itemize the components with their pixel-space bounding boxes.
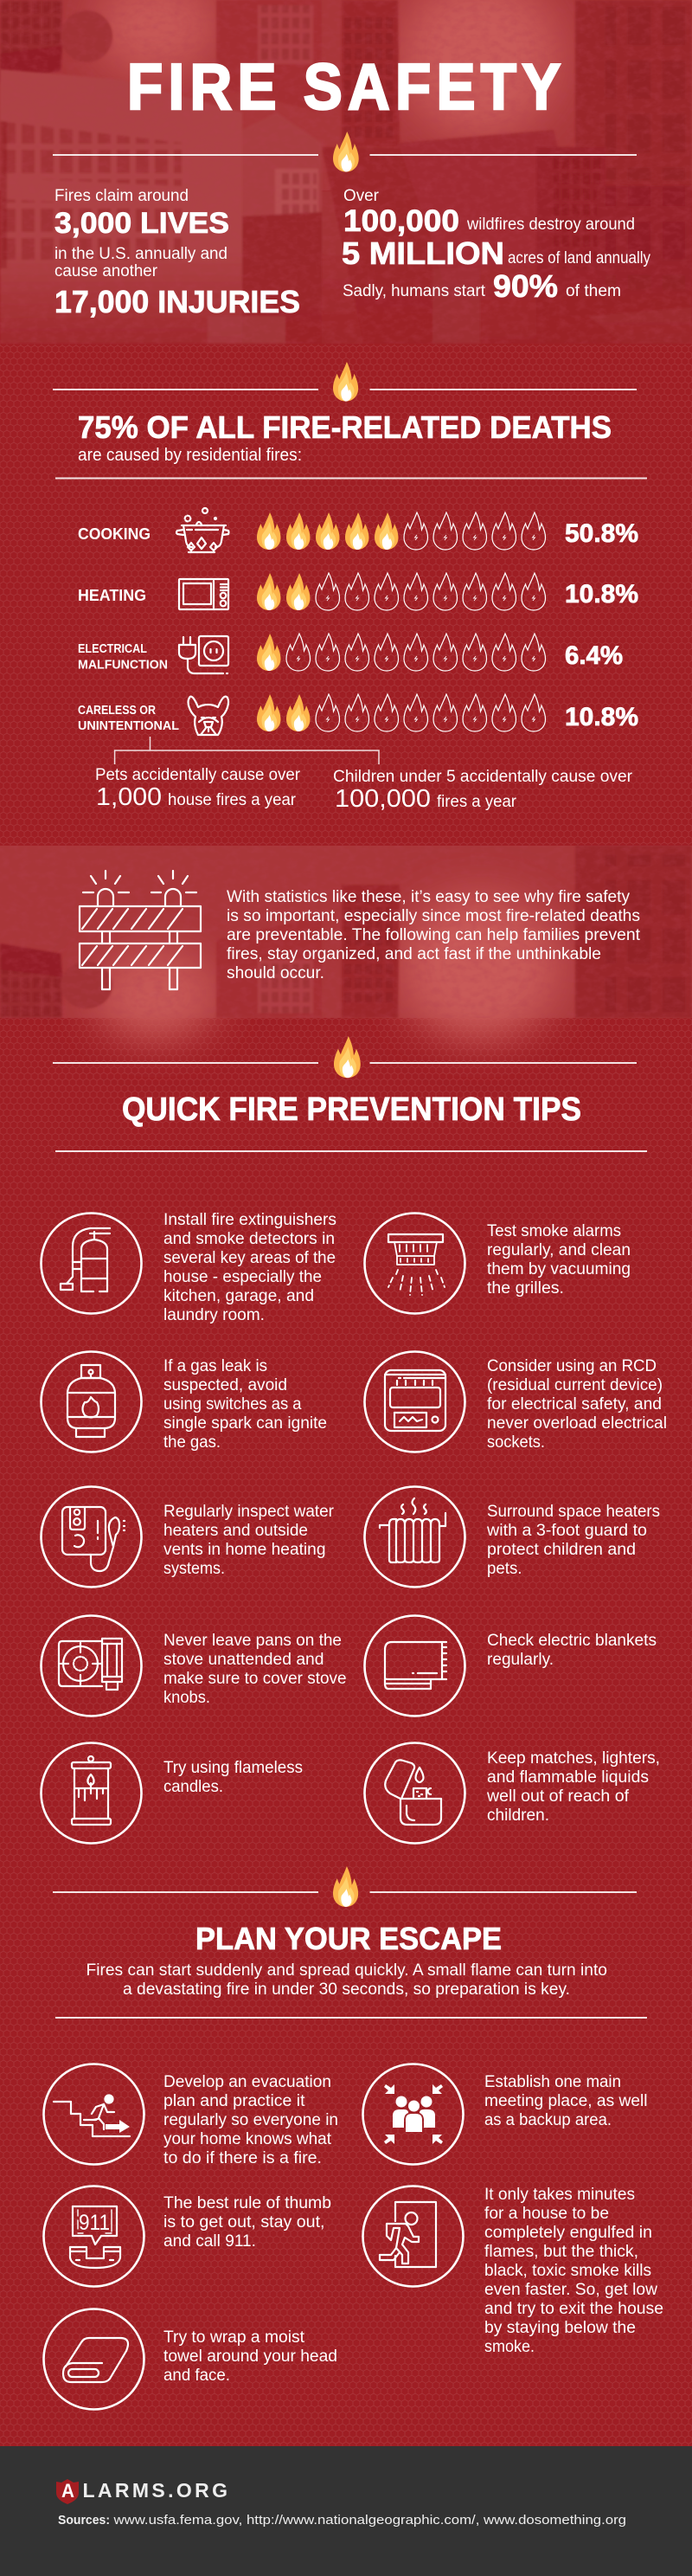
step: meeting place: as a backup area. [484,2111,612,2129]
text block: lives stats: 3,000 LIVES [54,207,229,240]
tip: extinguisher: laundry room. [163,1306,265,1324]
tip: space heater: Surround space heaters [487,1503,660,1521]
text block: intro: fires, stay organized, and act fast if the unthinkable [227,945,601,963]
step: get low and exit: by staying below the [484,2319,636,2337]
text block: lives stats: 17,000 INJURIES [54,284,300,319]
text block: wildfire stats [342,187,650,304]
row: cooking [78,508,638,552]
row: electrical malfunction: MALFUNCTION [78,658,168,672]
tip: water heater: Regularly inspect water [163,1503,335,1521]
step: get low and exit: flames, but the thick, [484,2243,638,2261]
tip: water heater: vents in home heating [163,1541,325,1559]
tip: electric blanket: Check electric blankets [487,1632,657,1650]
step: get low and exit: smoke. [484,2338,535,2356]
tip: lighter: and flammable liquids [487,1768,649,1787]
text block: intro: are preventable. The following can help families prevent [227,926,641,944]
divider: tips section [53,1036,637,1078]
tip: extinguisher: several key areas of the [163,1249,336,1267]
step: evacuation plan: your home knows what [163,2130,332,2148]
title: FIRE SAFETY [127,51,561,124]
text block: escape intro [86,1961,607,1999]
tip: lighter: well out of reach of [486,1787,630,1806]
tip: residual current device: sockets. [487,1433,545,1452]
text block: intro: should occur. [227,964,324,982]
tip: space heater: protect children and [487,1541,636,1559]
tip: stove [42,1615,346,1716]
row: cooking: 50.8% [565,519,638,548]
text block: escape intro: Fires can start suddenly and spread quickly. A small flame can turn into [86,1961,607,1980]
tip: residual current device: Consider using an RCD [487,1357,657,1375]
row: careless or unintentional: UNINTENTIONAL [78,719,179,733]
row: heating: 10.8% [565,580,638,609]
text block: wildfire stats: 5 MILLION [342,235,504,271]
step: call 911: The best rule of thumb [163,2194,331,2212]
step: evacuation plan [43,2064,338,2167]
tip: candle [42,1743,303,1844]
step: evacuation plan: regularly so everyone in [163,2111,338,2129]
heading: escape: PLAN YOUR ESCAPE [195,1921,502,1956]
row: electrical malfunction: ELECTRICAL [78,642,147,656]
tip: smoke alarm: regularly, and clean [487,1241,631,1259]
row: heating: HEATING [78,587,146,604]
tip: gas cylinder: the gas. [163,1433,221,1452]
divider: escape section [53,1866,637,1907]
tip: lighter: Keep matches, lighters, [487,1749,660,1768]
tip: residual current device: for electrical safety, and [487,1395,662,1414]
step: get low and exit [363,2186,663,2356]
callout: pets: house fires a year [168,791,297,809]
step: get low and exit: even faster. So, get low [484,2281,657,2299]
tip: extinguisher: kitchen, garage, and [163,1287,314,1305]
tip: residual current device [365,1352,667,1452]
callout: pets [95,766,301,811]
tip: gas cylinder: If a gas leak is [163,1357,267,1375]
tip: gas cylinder: suspected, avoid [163,1376,287,1394]
sources: www.usfa.fema.gov, http://www.nationalgeographic.com/, www.dosomething.org [112,2513,626,2528]
tip: smoke alarm: Test smoke alarms [487,1222,621,1240]
row: heating [78,573,638,610]
step: moist towel: Try to wrap a moist [163,2328,305,2347]
step: meeting place: Establish one main [484,2073,621,2091]
tip: water heater [42,1487,335,1587]
callout: children [333,768,633,813]
text block: lives stats: cause another [54,262,158,280]
heading: tips: QUICK FIRE PREVENTION TIPS [122,1092,581,1128]
step: moist towel: towel around your head [163,2347,337,2366]
text block: escape intro: a devastating fire in under 30 seconds, so preparation is key. [123,1980,570,1999]
text block: intro: With statistics like these, it’s easy to see why fire safety [227,888,630,906]
text block: intro: is so important, especially since most fire-related deaths [227,907,640,925]
step: call 911: 911 [79,2211,110,2235]
tip: stove: Never leave pans on the [163,1632,342,1650]
tip: candle: Try using flameless [163,1759,303,1777]
step: meeting place [363,2064,647,2164]
heading: deaths: 75% OF ALL FIRE-RELATED DEATHS [78,409,612,445]
tip: space heater: pets. [487,1560,522,1578]
row: electrical malfunction: 6.4% [565,641,623,670]
step: call 911 [43,2186,331,2287]
tip: space heater [365,1487,660,1587]
step: evacuation plan: to do if there is a fire. [163,2149,322,2167]
step: call 911: is to get out, stay out, [163,2213,325,2231]
step: get low and exit: for a house to be [484,2205,609,2223]
tip: electric blanket: regularly. [487,1651,554,1669]
callout: children: Children under 5 accidentally cause over [333,768,633,786]
text block: wildfire stats: 90% [493,268,558,304]
row: careless or unintentional: CARELESS OR [78,704,156,718]
tip: extinguisher: and smoke detectors in [163,1230,335,1248]
icon: barricade [80,871,201,989]
tip: residual current device: (residual current device) [487,1376,663,1394]
callout: children: 100,000 [335,785,431,813]
tip: extinguisher [42,1211,336,1324]
tip: candle: candles. [163,1778,223,1796]
row: electrical malfunction [78,634,623,673]
tip: lighter: children. [487,1806,549,1825]
divider: hero [53,132,637,171]
text block: lives stats: Fires claim around [54,187,189,205]
step: evacuation plan: Develop an evacuation [163,2073,331,2091]
step: get low and exit: black, toxic smoke kills [484,2262,651,2280]
row: cooking: COOKING [78,525,151,543]
text block: wildfire stats: wildfires destroy around [466,216,635,234]
tip: space heater: with a 3-foot guard to [486,1522,647,1540]
text block: lives stats [54,187,300,319]
tip: smoke alarm [365,1214,631,1314]
callout: pets: Pets accidentally cause over [95,766,301,784]
text block: wildfire stats: of them [566,282,621,300]
tip: electric blanket [365,1615,657,1716]
step: meeting place: meeting place, as well [484,2092,647,2110]
tip: gas cylinder: using switches as a [163,1395,302,1414]
panel: banner photo [0,846,692,1041]
row: careless or unintentional: 10.8% [565,703,638,731]
tip: smoke alarm: them by vacuuming [487,1260,631,1278]
panel: footer [0,2446,692,2576]
step: get low and exit: It only takes minutes [484,2186,635,2204]
row: careless or unintentional [78,694,638,735]
tip: stove: make sure to cover stove [163,1670,346,1688]
text block: intro [227,888,641,982]
text block: wildfire stats: 100,000 [343,204,459,238]
text block: wildfire stats: Over [343,187,380,205]
tip: extinguisher: Install fire extinguishers [163,1211,336,1229]
logo: LARMS.ORG [83,2479,227,2502]
tip: residual current device: never overload electrical [487,1414,667,1433]
tip: stove: knobs. [163,1689,210,1707]
callout: children: fires a year [437,793,517,811]
step: get low and exit: and try to exit the house [484,2300,663,2318]
text block: wildfire stats: Sadly, humans start [343,282,486,300]
step: get low and exit: completely engulfed in [484,2224,652,2242]
step: evacuation plan: plan and practice it [163,2092,305,2110]
text block: lives stats: in the U.S. annually and [54,245,227,263]
sources: Sources: [58,2513,110,2528]
subheading: deaths: are caused by residential fires: [78,446,302,465]
tip: water heater: systems. [163,1560,225,1578]
tip: water heater: heaters and outside [163,1522,308,1540]
tip: extinguisher: house - especially the [163,1268,322,1286]
step: moist towel [43,2309,337,2410]
divider: deaths section [53,362,637,402]
bracket connector [115,737,379,764]
tip: gas cylinder [42,1352,327,1452]
tip: smoke alarm: the grilles. [487,1279,564,1298]
callout: pets: 1,000 [96,783,162,811]
tip: gas cylinder: single spark can ignite [163,1414,327,1433]
step: call 911: and call 911. [163,2232,256,2251]
logo: A [61,2480,74,2502]
text block: wildfire stats: acres of land annually [508,249,650,267]
panel: hero photo [0,0,692,344]
step: moist towel: and face. [163,2367,230,2385]
tip: stove: stove unattended and [163,1651,324,1669]
tip: lighter [365,1743,660,1844]
